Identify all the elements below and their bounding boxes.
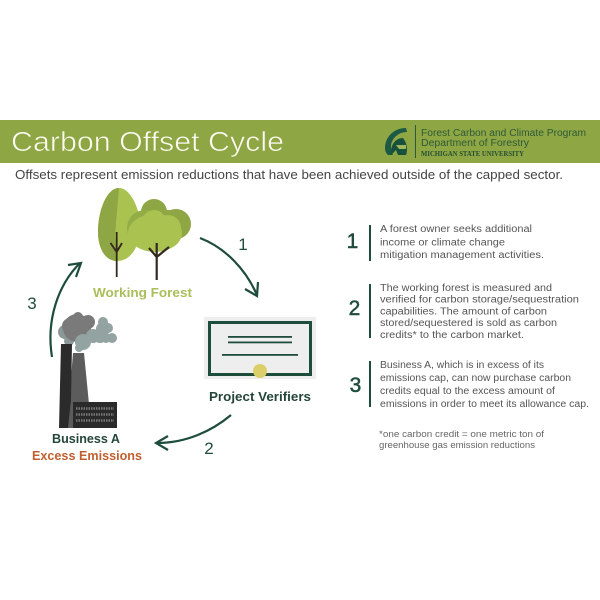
step 3 text: credits equal to the excess amount of: [380, 386, 555, 397]
header banner: [0, 120, 600, 163]
step 1 number: 1: [347, 230, 358, 253]
icon: factory: [58, 312, 117, 428]
program text: [421, 128, 586, 158]
step 1 text: income or climate change: [380, 238, 505, 248]
label: project verifiers: Project Verifiers: [209, 389, 311, 404]
step 3 text: emissions in order to meet its allowance cap.: [380, 399, 589, 410]
intro text: Offsets represent emission reductions that have been achieved outside of the capped sector.: [15, 167, 563, 182]
step 2 text: The working forest is measured and: [380, 283, 552, 294]
certificate seal: [253, 364, 267, 378]
step 1 text: [380, 224, 544, 261]
title: Carbon Offset Cycle: [11, 126, 284, 157]
label: business a: Business A: [52, 431, 121, 446]
footnote: *one carbon credit = one metric ton of: [379, 429, 545, 439]
number 3 on cycle: 3: [27, 294, 37, 313]
step 3 number: 3: [350, 374, 361, 397]
label: excess emissions: Excess Emissions: [32, 448, 142, 463]
number 2 on cycle: 2: [204, 439, 214, 458]
step 3: [350, 360, 589, 410]
step 2 text: credits* to the carbon market.: [380, 330, 524, 341]
step 3 text: [380, 360, 589, 410]
step 2 text: verified for carbon storage/sequestration: [380, 295, 579, 306]
arrow 2: [156, 415, 231, 450]
arrow 1: [200, 238, 258, 296]
icon: spartan helmet logo: [385, 128, 407, 155]
footnote: greenhouse gas emission reductions: [379, 440, 536, 450]
building: [73, 402, 117, 428]
number 1 on cycle: 1: [238, 235, 248, 254]
step 1: [347, 224, 544, 261]
program text: MICHIGAN STATE UNIVERSITY: [421, 149, 525, 158]
gray chimney: [67, 353, 89, 428]
footnote: [379, 429, 545, 450]
tree two: [127, 199, 191, 280]
program text: Department of Forestry: [421, 138, 529, 149]
step 2 text: stored/sequestered is sold as carbon: [380, 318, 557, 329]
step 1 text: mitigation management activities.: [380, 250, 544, 261]
step 2 text: [380, 283, 579, 341]
icon: certificate: [204, 317, 316, 379]
dark chimney: [59, 344, 72, 428]
step 3 text: emissions cap, can now purchase carbon: [380, 373, 571, 384]
tree one: [98, 188, 140, 277]
label: working forest: Working Forest: [93, 285, 193, 300]
arrow 3: [50, 263, 81, 357]
icon: trees: [98, 188, 191, 280]
smoke: [58, 312, 117, 352]
step 2 number: 2: [349, 297, 360, 320]
step 2: [349, 283, 579, 341]
step 3 text: Business A, which is in excess of its: [380, 360, 544, 371]
program text: Forest Carbon and Climate Program: [421, 128, 586, 139]
step 1 text: A forest owner seeks additional: [380, 224, 532, 235]
step 2 text: capabilities. The amount of carbon: [380, 306, 547, 318]
